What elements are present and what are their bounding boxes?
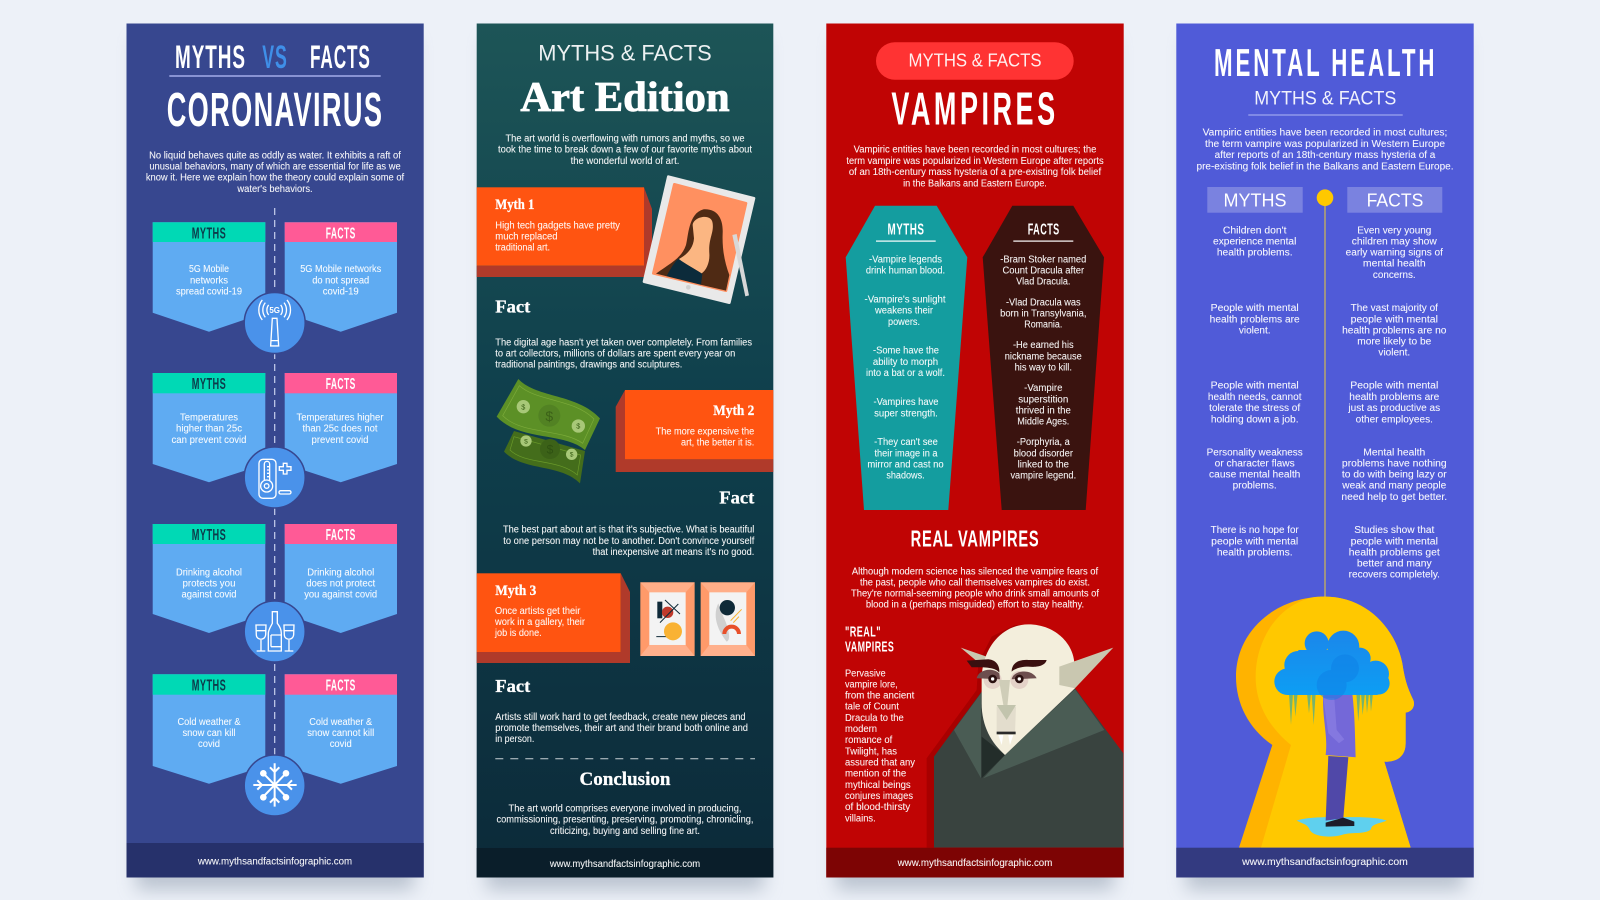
sidebar paragraph: conjures images <box>845 791 913 802</box>
title: coronavirus: CORONAVIRUS <box>167 84 383 137</box>
myth card 2: MYTHS <box>192 376 226 393</box>
coffin: myths <box>846 206 967 510</box>
coffin: facts: Romania. <box>1024 320 1062 331</box>
myth 3 banner: Myth 3 <box>495 583 536 599</box>
coffin: myths: ability to morph <box>873 357 938 368</box>
myths column: health problems are <box>1210 314 1300 325</box>
subheading: "real" vampires: "REAL" <box>845 623 881 640</box>
myths column: There is no hope for <box>1211 525 1299 536</box>
intro paragraph <box>1196 128 1454 172</box>
icon: 5G tower: 5G <box>269 306 280 315</box>
coffin: myths: super strength. <box>874 408 938 419</box>
facts column: children may show <box>1352 236 1438 247</box>
intro paragraph: Vampiric entities have been recorded in most cultures; the <box>854 145 1096 156</box>
heading: myths vs facts: FACTS <box>310 39 371 75</box>
myths column: or character flaws <box>1215 458 1295 469</box>
myth card 1: 5G Mobile <box>189 264 229 275</box>
panel: mental health <box>1176 24 1474 878</box>
conclusion text: commissioning, presenting, preserving, promoting, chronicling, <box>496 815 754 826</box>
myth 1 banner: High tech gadgets have pretty <box>495 220 620 231</box>
intro paragraph: water's behaviors. <box>236 184 313 195</box>
intro paragraph: term vampire was popularized in Western Europe after reports <box>846 156 1104 167</box>
facts column: other employees. <box>1356 414 1433 425</box>
coffin: facts: -Porphyria, a <box>1017 437 1070 448</box>
illustration: nosferatu vampire <box>927 624 1123 848</box>
sidebar paragraph: modern <box>845 724 877 735</box>
intro paragraph <box>498 134 752 167</box>
coffin: facts: -Vampire <box>1024 383 1062 394</box>
real vampires paragraph: They're normal-seeming people who drink small amounts of <box>851 589 1099 600</box>
fact card 4 <box>285 674 397 784</box>
coffin: facts: FACTS <box>1028 221 1060 238</box>
illustration: banknotes: $ <box>521 402 525 411</box>
myth 2 banner <box>616 390 773 472</box>
icon: snowflake <box>244 755 305 816</box>
facts column: concerns. <box>1373 270 1416 281</box>
facts column: Mental health <box>1363 447 1425 458</box>
dashed timeline <box>274 208 276 770</box>
intro paragraph: after reports of an 18th-century mass hysteria of a <box>1215 150 1436 161</box>
conclusion text: criticizing, buying and selling fine art. <box>550 826 700 837</box>
fact card 4: covid <box>330 739 352 750</box>
intro paragraph: of an 18th-century mass hysteria of a pre-existing folk belief <box>849 167 1101 178</box>
myths column: experience mental <box>1213 236 1296 247</box>
conclusion text: The art world comprises everyone involved in producing, <box>508 804 742 815</box>
panel background <box>1176 24 1474 878</box>
sidebar paragraph <box>845 668 915 824</box>
myth 2 banner: The more expensive the <box>656 426 754 437</box>
sidebar paragraph: Dracula to the <box>845 713 904 724</box>
pill heading <box>876 42 1074 80</box>
coffin: myths: -Vampire legends <box>869 254 942 265</box>
coffin: facts: vampire legend. <box>1010 471 1076 482</box>
facts column: The vast majority of <box>1351 303 1438 314</box>
sidebar paragraph: mythical beings <box>845 780 911 791</box>
subtitle: MYTHS & FACTS <box>1254 88 1396 109</box>
myth card 1: MYTHS <box>192 225 226 242</box>
myth card 2 <box>153 373 265 482</box>
facts column: Even very young <box>1357 225 1431 236</box>
title: mental health: MENTAL HEALTH <box>1214 42 1437 85</box>
fact text 2: The best part about art is that it's subjective. What is beautiful <box>503 525 754 536</box>
myth card 3: MYTHS <box>192 527 226 544</box>
footer bar <box>477 848 773 878</box>
facts column: Studies show that <box>1354 525 1435 536</box>
column label: facts: FACTS <box>1367 191 1423 211</box>
myth 3 banner: Once artists get their <box>495 606 581 617</box>
illustration: banknotes: $ <box>570 452 574 459</box>
myths column: problems. <box>1233 481 1277 492</box>
facts column <box>1341 225 1447 581</box>
intro paragraph: took the time to break down a few of our favorite myths about <box>498 145 752 156</box>
myth 1 banner: Myth 1 <box>495 197 534 213</box>
myth 1 banner: much replaced <box>495 231 558 242</box>
coffin: myths: MYTHS <box>888 221 924 238</box>
footer bar: www.mythsandfactsinfographic.com <box>897 858 1052 869</box>
pill heading: MYTHS & FACTS <box>908 51 1042 71</box>
coffin: facts <box>983 206 1104 510</box>
myths column: People with mental <box>1211 381 1299 392</box>
subheading: "real" vampires: VAMPIRES <box>845 638 894 655</box>
myth 3 banner: job is done. <box>494 628 542 639</box>
fact card 1: 5G Mobile networks <box>300 264 381 275</box>
sidebar paragraph: romance of <box>845 735 893 746</box>
panel drop shadows <box>136 40 1464 890</box>
myth card 3: protects you <box>182 579 236 590</box>
myths column: holding down a job. <box>1211 414 1299 425</box>
fact card 1: FACTS <box>326 225 356 242</box>
coffin: myths: into a bat or a wolf. <box>866 368 945 379</box>
facts column: more likely to be <box>1357 337 1431 348</box>
coffin: myths: drink human blood. <box>866 265 945 276</box>
fact card 1: do not spread <box>312 275 369 286</box>
myths column: health needs, cannot <box>1208 392 1302 403</box>
myths column: violent. <box>1239 325 1271 336</box>
myth card 3: Drinking alcohol <box>176 568 242 579</box>
coffin: facts: his way to kill. <box>1015 362 1072 373</box>
conclusion heading: Conclusion <box>580 769 671 790</box>
panel: art edition <box>477 24 773 878</box>
footer bar <box>126 843 424 878</box>
myths column: people with mental <box>1211 536 1298 547</box>
coffin: facts: Middle Ages. <box>1017 417 1069 428</box>
row 4: cold weather <box>153 674 397 816</box>
myths column: health problems. <box>1217 248 1293 259</box>
sidebar paragraph: Twilight, has <box>845 746 897 757</box>
illustration: banknotes: $ <box>547 443 554 457</box>
illustration: banknotes: $ <box>576 422 580 431</box>
myth card 4: Cold weather & <box>178 717 241 728</box>
fact text 3: promote themselves, their art and their brand both online and <box>495 723 748 734</box>
myth 3 banner: work in a gallery, their <box>494 617 586 628</box>
fact text 2 <box>503 525 755 558</box>
sidebar paragraph: mention of the <box>845 769 906 780</box>
fact card 4: snow cannot kill <box>307 728 374 739</box>
intro paragraph: the term vampire was popularized in Western Europe <box>1205 139 1445 150</box>
column label: myths: MYTHS <box>1224 191 1286 211</box>
fact text 2: to one person may not be to another. Don't convince yourself <box>503 536 755 547</box>
coffin: facts: blood disorder <box>1014 448 1074 459</box>
fact card 2: Temperatures higher <box>296 413 384 424</box>
fact text 3: in person. <box>495 734 534 745</box>
coffin: myths: weakens their <box>874 306 934 317</box>
facts column: problems have nothing <box>1342 458 1447 469</box>
intro paragraph: The art world is overflowing with rumors and myths, so we <box>506 134 744 145</box>
myths column: Children don't <box>1223 225 1287 236</box>
fact text 3: Artists still work hard to get feedback, create new pieces and <box>495 712 746 723</box>
fact heading 1: Fact <box>495 296 530 316</box>
facts column: People with mental <box>1350 381 1438 392</box>
intro paragraph: pre-existing folk belief in the Balkans and Eastern Europe. <box>1196 161 1454 172</box>
sidebar paragraph: from the ancient <box>845 691 915 702</box>
myth 2 banner: art, the better it is. <box>681 437 754 448</box>
myth card 3: against covid <box>182 590 236 601</box>
myth card 2: higher than 25c <box>176 424 242 435</box>
coffin: myths: -Some have the <box>873 346 939 357</box>
facts column: early warning signs of <box>1346 248 1443 259</box>
myths column: health problems. <box>1217 547 1293 558</box>
myths column: People with mental <box>1211 303 1299 314</box>
intro paragraph <box>146 150 404 195</box>
sidebar paragraph: vampire lore, <box>845 679 898 690</box>
facts column: health problems are <box>1349 392 1439 403</box>
coffin: facts: superstition <box>1018 394 1068 405</box>
heading: myths vs facts: MYTHS <box>175 39 246 75</box>
fact card 3: Drinking alcohol <box>307 568 374 579</box>
coffin: facts: -Vlad Dracula was <box>1006 297 1081 308</box>
coffin: facts: Vlad Dracula. <box>1016 277 1070 288</box>
coffin: myths: shadows. <box>886 471 925 482</box>
coffin: myths: -Vampire's sunlight <box>864 295 946 306</box>
myth card 2: Temperatures <box>180 413 238 424</box>
heading: myths vs facts <box>169 39 381 77</box>
myth card 1: networks <box>190 275 228 286</box>
fact card 4: Cold weather & <box>309 717 373 728</box>
row 3: alcohol <box>153 524 397 662</box>
panel: vampires <box>826 24 1124 878</box>
myth 2 banner: Myth 2 <box>713 403 754 419</box>
fact text 1: The digital age hasn't yet taken over completely. From families <box>495 337 752 348</box>
panel background <box>126 24 424 878</box>
real vampires paragraph: Although modern science has silenced the vampire fears of <box>852 566 1098 577</box>
title: art edition: Art Edition <box>520 75 730 121</box>
timeline dot <box>1317 189 1333 206</box>
coffin: facts: -He earned his <box>1013 340 1074 351</box>
myth card 4: covid <box>198 739 220 750</box>
coffin: facts: Count Dracula after <box>1002 265 1085 276</box>
myth card 4 <box>153 674 265 784</box>
intro paragraph: in the Balkans and Eastern Europe. <box>903 178 1047 189</box>
illustration: banknotes: $ <box>545 408 553 424</box>
facts column: to do with being lazy or <box>1342 470 1447 481</box>
fact text 2: that inexpensive art means it's no good. <box>593 547 754 558</box>
title: vampires: VAMPIRES <box>891 82 1059 134</box>
intro paragraph: unusual behaviors, many of which are essential for life as we <box>149 162 401 172</box>
fact card 2: than 25c does not <box>302 424 378 435</box>
coffin: myths: their image in a <box>874 448 938 459</box>
facts column: just as productive as <box>1347 403 1440 414</box>
coffin: facts: nickname because <box>1005 351 1082 362</box>
panel background <box>477 24 773 878</box>
fact card 2 <box>285 373 397 482</box>
coffin: facts: thrived in the <box>1016 405 1071 416</box>
icon: thermometer <box>244 447 305 508</box>
footer bar: www.mythsandfactsinfographic.com <box>197 856 352 867</box>
subheading: "real" vampires <box>845 623 894 655</box>
real vampires paragraph: the past, people who call themselves vampires do exist. <box>860 577 1090 588</box>
coffin: facts: linked to the <box>1018 459 1069 470</box>
fact heading 3: Fact <box>495 676 530 696</box>
fact heading 2: Fact <box>719 488 754 508</box>
row 2: temperature <box>153 373 397 508</box>
facts column: health problems are no <box>1342 325 1446 336</box>
sidebar paragraph: villains. <box>845 813 876 824</box>
footer bar: www.mythsandfactsinfographic.com <box>1241 857 1408 868</box>
coffin: myths: -Vampires have <box>874 397 938 408</box>
myth card 3 <box>153 524 265 633</box>
intro paragraph: Vampiric entities have been recorded in most cultures; <box>1203 128 1447 139</box>
myths column: Personality weakness <box>1207 447 1303 458</box>
column label: myths <box>1207 187 1303 213</box>
myth card 1: spread covid-19 <box>176 286 242 297</box>
facts column: need help to get better. <box>1341 492 1447 503</box>
icon: 5G tower <box>244 292 305 354</box>
facts column: better and many <box>1357 558 1432 569</box>
illustration: banknotes <box>497 379 600 483</box>
illustration: framed abstract art 2 <box>701 582 755 656</box>
myth card 2: can prevent covid <box>172 435 246 446</box>
coffin: myths: powers. <box>888 317 920 328</box>
fact card 1: covid-19 <box>323 286 359 297</box>
real vampires paragraph: blood in a (perhaps misguided) effort to stay healthy. <box>866 600 1084 611</box>
fact text 3 <box>495 712 748 745</box>
coffin: facts: born in Transylvania, <box>1000 308 1086 319</box>
fact text 1: traditional paintings, drawings and sculptures. <box>495 360 682 371</box>
sidebar paragraph: of blood-thirsty <box>845 802 910 813</box>
facts column: violent. <box>1378 348 1410 359</box>
fact card 3: you against covid <box>304 590 377 601</box>
fact card 4: FACTS <box>326 678 356 694</box>
fact card 2: prevent covid <box>312 435 368 446</box>
facts column: mental health <box>1363 259 1426 270</box>
fact card 3: does not protect <box>306 579 375 590</box>
facts column: weak and many people <box>1341 481 1446 492</box>
footer bar <box>1176 848 1474 878</box>
fact text 1 <box>495 337 752 371</box>
facts column: recovers completely. <box>1349 570 1440 581</box>
fact card 1 <box>285 222 397 332</box>
illustration: keyhole head with rain cloud <box>1236 597 1414 848</box>
illustration: framed abstract art 1 <box>640 582 695 656</box>
coffin: myths: mirror and cast no <box>867 459 944 470</box>
myth card 1 <box>153 222 265 332</box>
sidebar paragraph: Pervasive <box>845 668 886 679</box>
myth 3 banner <box>477 573 630 663</box>
myths column: cause mental health <box>1209 470 1300 481</box>
intro paragraph <box>846 145 1104 189</box>
fact card 3 <box>285 524 397 633</box>
heading: myths vs facts: VS <box>262 39 288 75</box>
illustration: tablet with portrait <box>644 177 754 303</box>
footer bar: www.mythsandfactsinfographic.com <box>549 859 700 870</box>
intro paragraph: No liquid behaves quite as oddly as water. It exhibits a raft of <box>149 150 401 161</box>
illustration: banknotes: $ <box>524 438 528 445</box>
real vampires paragraph <box>851 566 1099 611</box>
fact card 2: FACTS <box>326 376 356 393</box>
conclusion text <box>496 804 754 837</box>
panel: coronavirus myths vs facts <box>126 24 424 878</box>
footer bar <box>826 848 1124 878</box>
facts column: people with mental <box>1351 536 1438 547</box>
column label: facts <box>1347 187 1442 213</box>
intro paragraph: the wonderful world of art. <box>571 156 679 167</box>
myths column <box>1207 225 1303 558</box>
sidebar paragraph: tale of Count <box>845 702 899 713</box>
heading: real vampires: REAL VAMPIRES <box>911 526 1039 552</box>
subtitle: MYTHS & FACTS <box>538 41 712 66</box>
myth card 4: snow can kill <box>182 728 236 739</box>
myths column: tolerate the stress of <box>1209 403 1301 414</box>
row 1: 5G <box>153 222 397 354</box>
coffin: myths: -They can't see <box>874 437 938 448</box>
panel background <box>826 24 1124 878</box>
facts column: people with mental <box>1351 314 1438 325</box>
intro paragraph: know it. Here we explain how the theory could explain some of <box>146 173 404 184</box>
sidebar paragraph: assured that any <box>845 758 915 769</box>
timeline line <box>1324 197 1326 600</box>
myth card 4: MYTHS <box>192 678 226 694</box>
facts column: health problems get <box>1349 547 1440 558</box>
fact card 3: FACTS <box>326 527 356 544</box>
myth 1 banner <box>477 187 652 277</box>
fact text 1: to art collectors, millions of dollars are spent every year on <box>495 349 735 360</box>
icon: wine bottle and glasses <box>244 601 305 662</box>
myth 1 banner: traditional art. <box>495 242 550 253</box>
coffin: facts: -Bram Stoker named <box>1000 254 1086 265</box>
